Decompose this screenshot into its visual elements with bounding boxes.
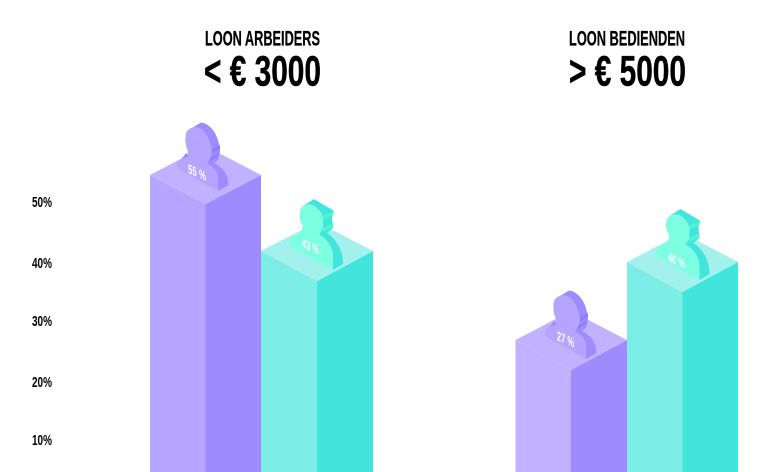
icon: person teal 40%	[656, 209, 710, 280]
title: loon arbeiders	[204, 28, 321, 96]
y axis labels: 20%	[32, 374, 52, 391]
title: loon arbeiders: < € 3000	[204, 48, 321, 96]
icon: person purple 55%	[177, 122, 228, 191]
title: loon bedienden	[569, 28, 686, 96]
y axis labels: 30%	[32, 313, 52, 330]
title: loon arbeiders: LOON ARBEIDERS	[205, 28, 320, 50]
y axis labels	[32, 194, 52, 449]
icon: person teal 43%: 43 %	[302, 236, 319, 257]
icon: person teal 43%	[290, 199, 343, 270]
icon: person purple 55%: 55 %	[188, 162, 206, 184]
title: loon bedienden: > € 5000	[569, 48, 686, 96]
bar: arbeiders purple 55%	[150, 146, 261, 472]
icon: person purple 27%	[545, 290, 596, 359]
y axis labels: 10%	[32, 432, 52, 449]
bar: arbeiders teal 43%	[261, 222, 373, 472]
y axis labels: 40%	[32, 255, 52, 272]
icon: person purple 27%: 27 %	[557, 329, 574, 350]
icon: person teal 40%: 40 %	[668, 250, 685, 271]
bar: bedienden teal 40%	[627, 233, 738, 472]
title: loon bedienden: LOON BEDIENDEN	[569, 28, 685, 50]
y axis labels: 50%	[32, 194, 52, 211]
bar: bedienden purple 27%	[516, 311, 627, 472]
